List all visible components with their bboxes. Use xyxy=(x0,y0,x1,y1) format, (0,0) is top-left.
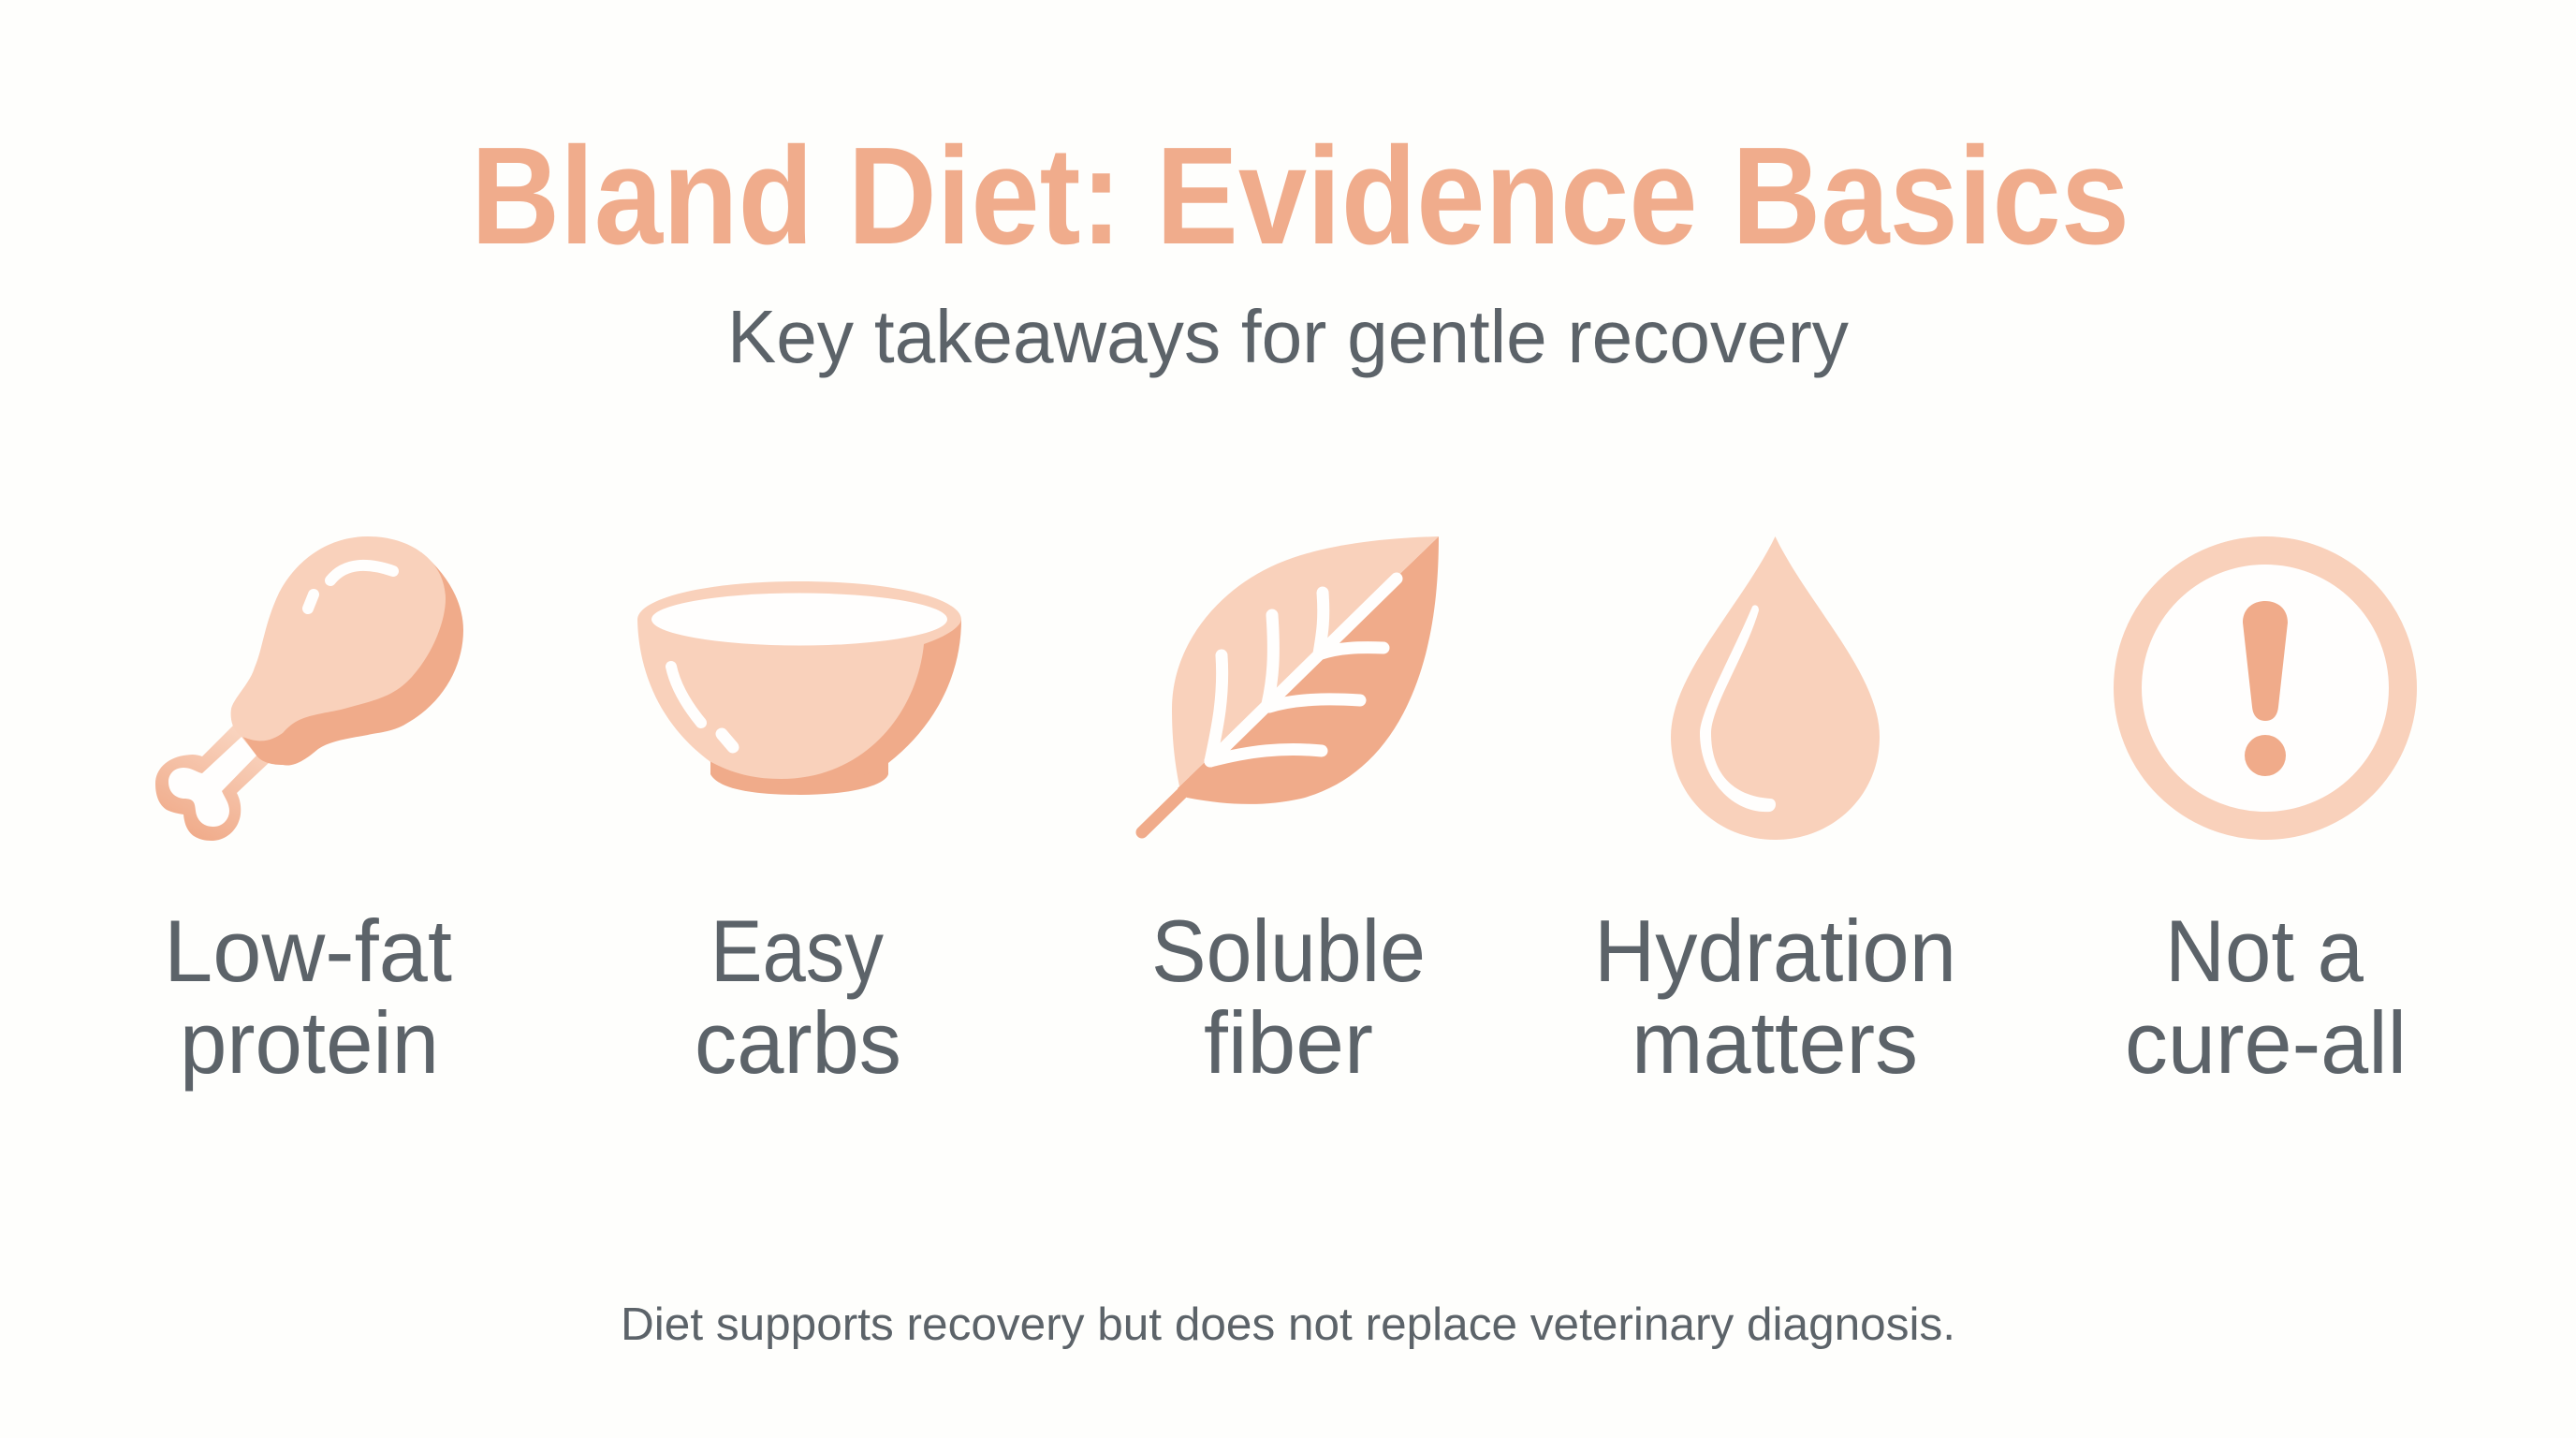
icon: chicken drumstick xyxy=(155,536,463,841)
label: low-fat protein xyxy=(164,902,452,1092)
icon: water drop xyxy=(1671,536,1880,840)
label: not a cure-all xyxy=(2125,902,2407,1092)
drumstick shaded meat xyxy=(242,552,463,766)
footer note: Diet supports recovery but does not replace veterinary diagnosis. xyxy=(621,1299,1955,1350)
label: easy carbs: carbs xyxy=(695,993,901,1092)
icon: leaf xyxy=(1142,536,1439,832)
bowl light body xyxy=(637,581,961,779)
leaf veins xyxy=(1210,579,1397,761)
label: hydration matters xyxy=(1594,902,1956,1092)
ring xyxy=(2128,550,2403,826)
exclamation dot xyxy=(2245,735,2286,776)
label: soluble fiber xyxy=(1151,902,1426,1092)
leaf light half xyxy=(1172,536,1439,786)
subtitle: Key takeaways for gentle recovery xyxy=(727,295,1849,378)
drop body xyxy=(1671,536,1880,840)
highlights xyxy=(330,565,393,580)
bowl shaded side xyxy=(710,618,961,784)
bone inner xyxy=(168,737,256,827)
exclamation bar xyxy=(2243,601,2288,721)
label: low-fat protein: Low-fat xyxy=(164,902,452,1000)
leaf stem xyxy=(1142,792,1183,832)
drop highlight xyxy=(1700,605,1776,812)
label: not a cure-all: Not a xyxy=(2165,902,2364,1000)
icon: bowl xyxy=(637,581,961,795)
title: Bland Diet: Evidence Basics xyxy=(471,119,2130,273)
icon: warning circle xyxy=(2128,550,2403,826)
label: soluble fiber: fiber xyxy=(1204,993,1373,1092)
drumstick light meat xyxy=(231,536,446,741)
label: low-fat protein: protein xyxy=(180,993,439,1092)
bowl foot xyxy=(710,749,888,795)
bowl opening xyxy=(651,594,947,646)
label: hydration matters: Hydration xyxy=(1594,902,1956,1000)
label: soluble fiber: Soluble xyxy=(1151,902,1426,1000)
label: easy carbs xyxy=(695,902,901,1092)
label: hydration matters: matters xyxy=(1632,993,1918,1092)
label: not a cure-all: cure-all xyxy=(2125,993,2407,1092)
bone outline xyxy=(155,726,269,841)
highlights xyxy=(671,667,701,723)
label: easy carbs: Easy xyxy=(710,902,884,1000)
leaf dark half xyxy=(1178,536,1439,804)
